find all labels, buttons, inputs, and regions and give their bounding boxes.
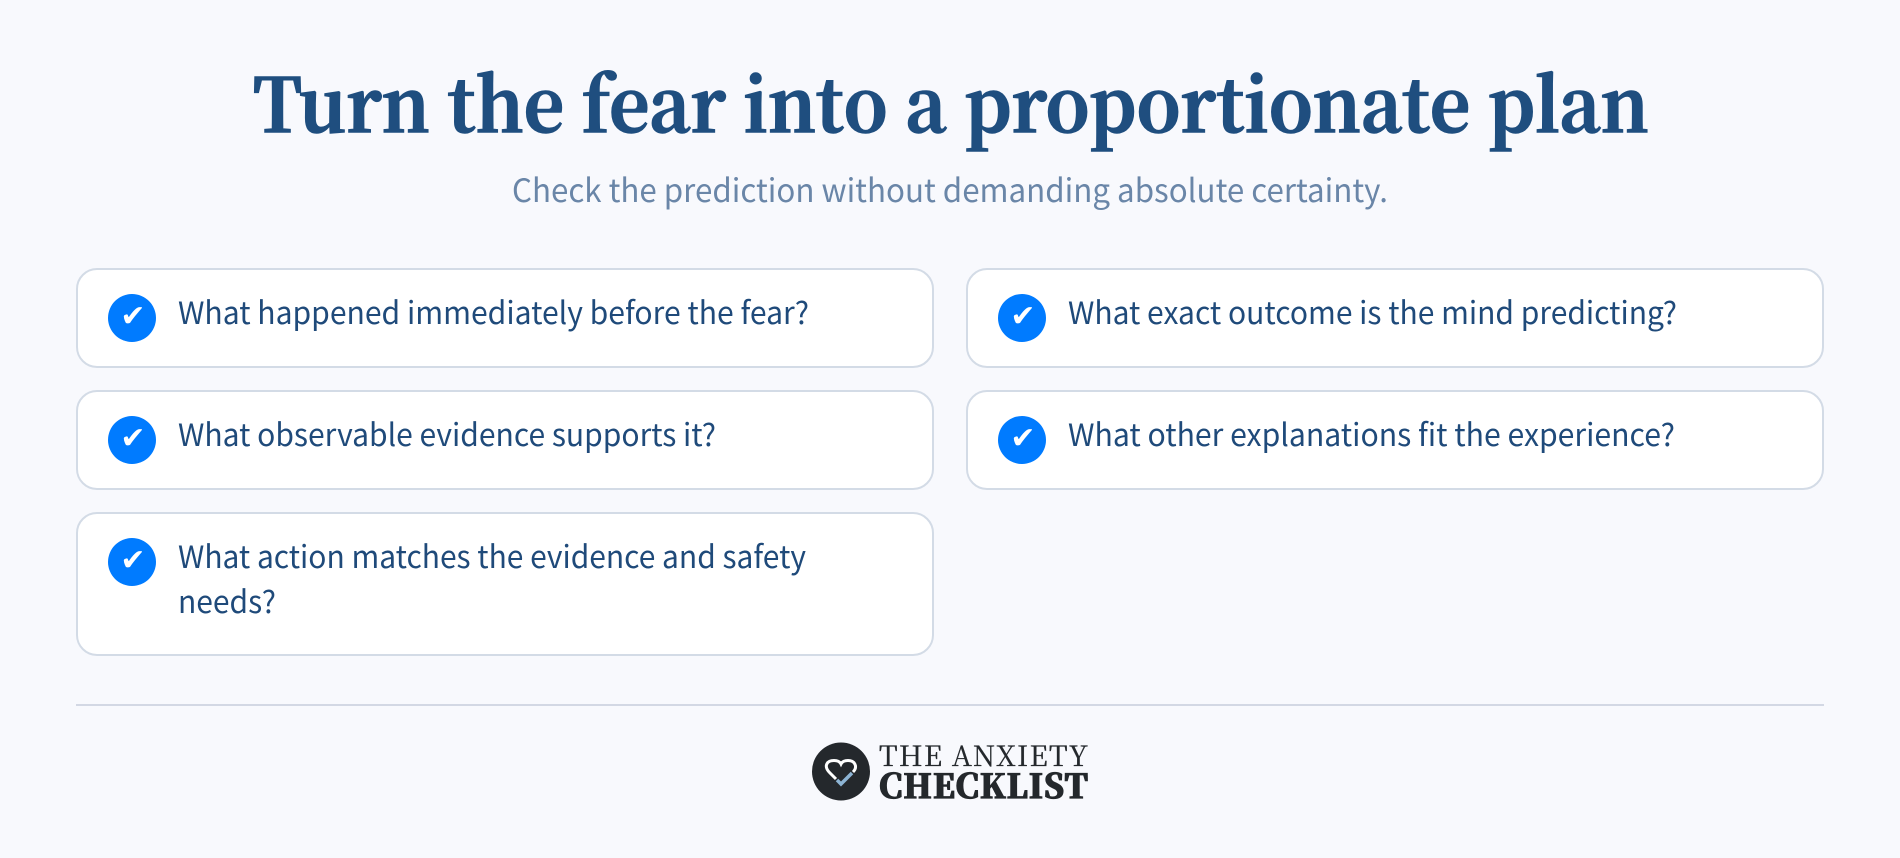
card: observable evidence [77,391,933,489]
card text [178,532,806,622]
icon: check: ✔ [1010,299,1036,334]
card text: What exact outcome is the mind predicting? [1068,288,1677,333]
icon: check: ✔ [120,543,146,578]
icon: check [998,294,1046,342]
subtitle: Check the prediction without demanding absolute certainty. [512,166,1388,212]
card text: What observable evidence supports it? [178,410,716,455]
card: other explanations [967,391,1823,489]
logo [812,735,1088,808]
card text: What action matches the evidence and safety [178,532,806,577]
logo wordmark: CHECKLIST [879,761,1088,808]
card text: needs? [178,577,276,622]
logo wordmark: THE ANXIETY [879,735,1088,775]
icon: check: ✔ [1010,421,1036,456]
card: exact outcome [967,269,1823,367]
icon: heart check [812,742,870,800]
icon: check [108,294,156,342]
title: Turn the fear into a proportionate plan [253,48,1649,154]
card text: What happened immediately before the fear? [178,288,809,333]
card: action matches [77,513,933,655]
icon: check [108,538,156,586]
icon: check: ✔ [120,299,146,334]
logo wordmark [879,735,1088,808]
icon: check [108,416,156,464]
card: what happened [77,269,933,367]
icon: check [998,416,1046,464]
card text: What other explanations fit the experience? [1068,410,1675,455]
icon: check: ✔ [120,421,146,456]
